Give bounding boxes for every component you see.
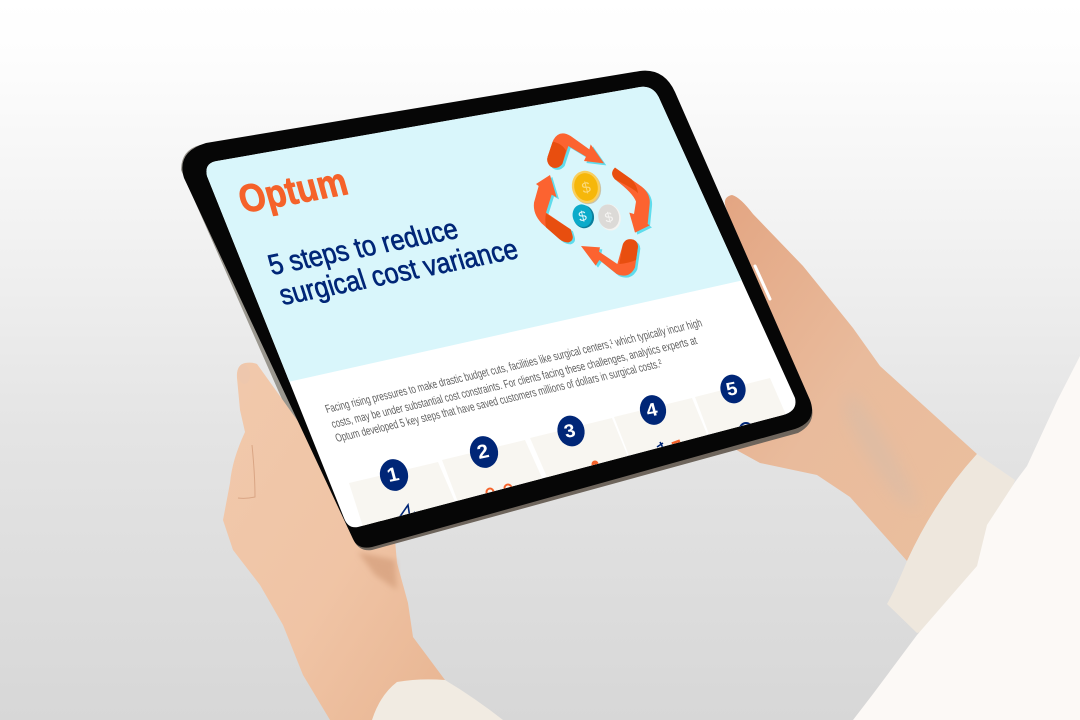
- step 1 badge: 1: [385, 464, 401, 487]
- side button highlight: [755, 266, 770, 299]
- arrows: [534, 133, 650, 276]
- intro paragraph: costs, may be under substantial cost constraints. For clients facing these challenges, analytics experts at: [329, 334, 699, 431]
- header panel: [206, 86, 742, 382]
- tablet bottom metal edge: [354, 408, 812, 550]
- arrow shadows: [536, 135, 652, 278]
- step 5 badge: 5: [724, 379, 740, 401]
- left hand: [223, 363, 445, 720]
- wrist shading: [845, 390, 920, 510]
- right cuff: [887, 454, 1015, 633]
- step 1 badge: [380, 459, 408, 491]
- step 2 badge: 2: [475, 441, 491, 464]
- intro paragraph: Facing rising pressures to make drastic budget cuts, facilities like surgical centers,¹ which typically incur high: [323, 316, 704, 416]
- step cards: [349, 378, 786, 526]
- step 3 badge: 3: [562, 421, 578, 443]
- tablet body: [182, 71, 812, 548]
- right sleeve: [853, 356, 1080, 720]
- icon: cycle arrows and coins: [534, 133, 652, 278]
- title: 5 steps to reduce: [264, 213, 462, 281]
- tablet silver side edge: [181, 145, 320, 440]
- step 3 badge: [557, 416, 585, 446]
- teal coin: [572, 204, 594, 228]
- tablet screen: [206, 86, 796, 528]
- thumb nail: [237, 364, 251, 384]
- step 4 badge: 4: [644, 400, 660, 422]
- grey coin: $: [603, 208, 615, 226]
- peeking card icons: [399, 423, 752, 518]
- title: surgical cost variance: [275, 234, 522, 311]
- step 2 badge: [470, 436, 498, 468]
- intro paragraph: Optum developed 5 key steps that have saved customers millions of dollars in surgical costs.²: [333, 357, 664, 445]
- step number badges: [376, 372, 749, 494]
- step 5 badge: [720, 374, 746, 404]
- gold coin: [572, 170, 602, 204]
- Optum logo: Optum: [234, 161, 352, 222]
- right hand: [720, 195, 977, 561]
- grey coin: [598, 204, 621, 230]
- left cuff: [372, 679, 503, 720]
- arrow dark tails: [545, 142, 638, 264]
- gold coin: $: [580, 179, 593, 197]
- teal coin: $: [577, 207, 588, 225]
- step 4 badge: [640, 395, 666, 425]
